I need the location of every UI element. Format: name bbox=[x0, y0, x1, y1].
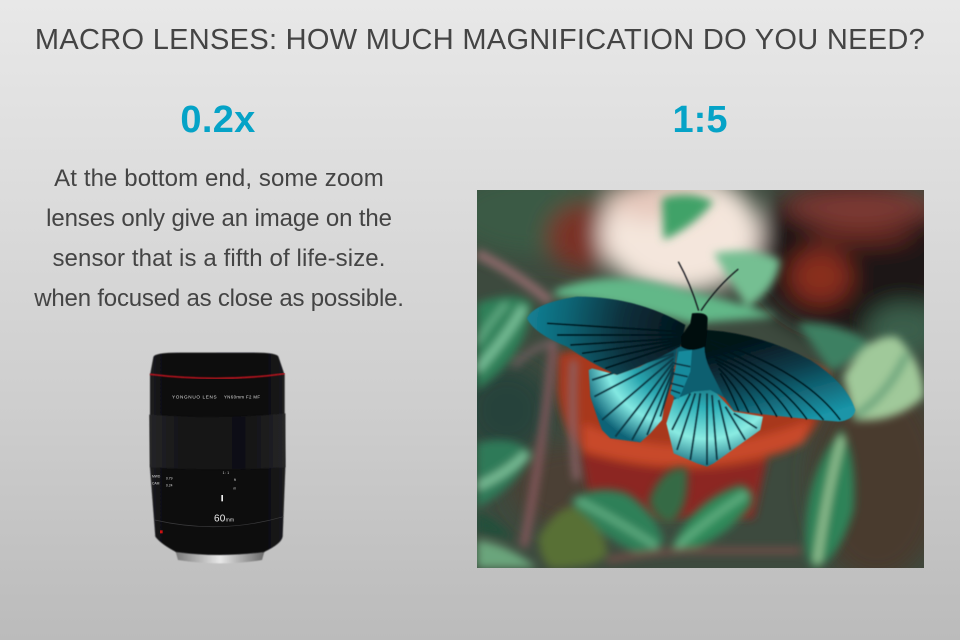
lens markings: ft bbox=[234, 478, 236, 482]
forewing left bbox=[527, 297, 685, 375]
lens markings: 0.24 bbox=[166, 484, 173, 488]
heading: 1:5: 1:5 bbox=[673, 99, 727, 141]
text block: description: At the bottom end, some zoom bbox=[54, 165, 384, 192]
blurred background bbox=[477, 190, 924, 568]
lens markings: YONGNUO LENS bbox=[172, 395, 217, 400]
abdomen bbox=[670, 350, 692, 399]
lens markings bbox=[152, 395, 260, 525]
text block: description: sensor that is a fifth of life-size. bbox=[52, 245, 386, 272]
focus ring bbox=[149, 413, 285, 469]
forewing veins bbox=[547, 323, 840, 420]
lens markings: 1 : 1 bbox=[223, 471, 229, 475]
red dot bbox=[160, 530, 163, 533]
red flower pot bbox=[557, 345, 830, 518]
central teal wing base bbox=[674, 347, 725, 400]
hind wing right bbox=[666, 387, 763, 467]
title: MACRO LENSES: HOW MUCH MAGNIFICATION DO YOU NEED? bbox=[35, 24, 925, 56]
leaves and stems bbox=[477, 195, 924, 568]
lens markings: m bbox=[233, 487, 236, 491]
lens markings: 60 bbox=[214, 514, 226, 525]
lens markings: 0.79 bbox=[166, 477, 173, 481]
text block: description: lenses only give an image on the bbox=[46, 205, 392, 232]
lens markings: MWD bbox=[152, 475, 161, 479]
lens barrel bbox=[150, 353, 285, 555]
hind wing left bbox=[589, 347, 677, 442]
lens markings: YN60mm F2 MF bbox=[224, 395, 260, 400]
lens markings: CAM bbox=[152, 481, 160, 485]
body bbox=[681, 313, 708, 350]
hind wing veins bbox=[592, 353, 757, 465]
antennae bbox=[678, 262, 738, 311]
text block: description bbox=[34, 165, 404, 312]
photo: teal butterfly on a plant bbox=[477, 190, 924, 568]
red ring bbox=[150, 374, 285, 378]
text block: description: when focused as close as possible. bbox=[34, 285, 404, 312]
forewing right bbox=[704, 330, 855, 422]
butterfly bbox=[527, 262, 855, 467]
icon: camera lens bbox=[148, 352, 286, 564]
lens lower edge bbox=[155, 517, 283, 527]
heading: 0.2x: 0.2x bbox=[180, 99, 256, 141]
lens mount bbox=[175, 548, 265, 563]
lens markings: mm bbox=[226, 518, 234, 524]
